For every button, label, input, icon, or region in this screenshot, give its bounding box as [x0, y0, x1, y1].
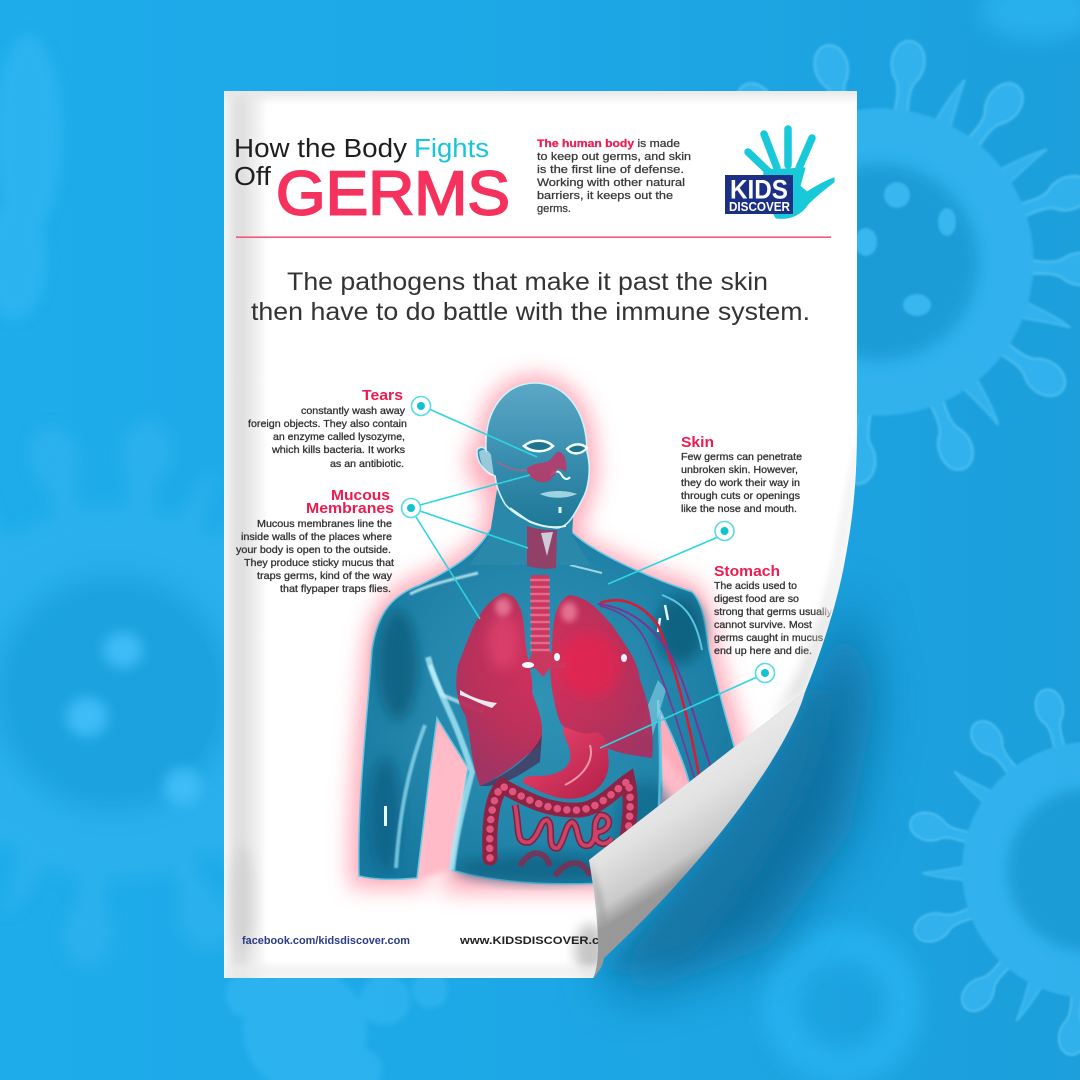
lungs — [456, 575, 653, 786]
chest rim highlights — [428, 657, 472, 870]
page curl cast shadow — [596, 590, 875, 990]
leader line: Tears — [429, 409, 537, 457]
right edge shading — [778, 440, 857, 711]
shoulder shading — [378, 610, 418, 720]
callout: Skin: they do work their way in — [681, 478, 800, 489]
callout: Skin — [608, 434, 802, 584]
poster sheet — [224, 91, 857, 979]
leader line: Skin — [608, 537, 718, 584]
leader lines: Mucous Membranes — [416, 475, 530, 619]
background blur: bottom left mottled virus — [226, 968, 448, 1080]
callout: Mucous Membranes: Mucous — [331, 487, 390, 504]
callout: Skin: through cuts or openings — [681, 491, 800, 502]
callout: Skin: Few germs can penetrate — [681, 452, 802, 463]
divider — [236, 236, 831, 238]
callout: Tears: which kills bacteria. It works — [271, 445, 405, 456]
icon: hand print — [748, 129, 834, 218]
callout: Stomach: cannot survive. Most — [714, 620, 812, 631]
callout: Skin: like the nose and mouth. — [681, 504, 797, 515]
title: Fights — [414, 135, 489, 163]
leader line: Stomach — [600, 677, 757, 748]
background light corner — [980, 0, 1080, 40]
nose — [551, 472, 570, 479]
callout: Tears: Tears — [362, 387, 403, 404]
subheading — [251, 268, 810, 326]
marker: Mucous Membranes — [402, 498, 420, 518]
callout: Mucous Membranes: traps germs, kind of the way — [257, 571, 393, 582]
logo: Kids Discover hand: DISCOVER — [729, 199, 791, 214]
intro text: The human body is made — [537, 138, 680, 150]
head — [477, 383, 589, 528]
callout: Tears — [248, 387, 537, 470]
flap tip shading — [590, 865, 606, 920]
background virus: bottom right — [907, 684, 1080, 1056]
callout: Tears: an enzyme called lysozyme, — [273, 432, 405, 443]
pink glow — [358, 383, 745, 884]
title: GERMS — [276, 160, 510, 228]
callout: Stomach: strong that germs usually — [714, 607, 833, 618]
footer: facebook.com/kidsdiscover.com — [242, 935, 410, 947]
intro text: germs. — [537, 203, 571, 215]
background blur: bottom centre — [780, 943, 904, 1067]
callout: Stomach — [600, 563, 833, 748]
callout: Tears: as an antibiotic. — [330, 459, 404, 470]
background virus: left core spots — [66, 632, 202, 806]
lower corner shading — [224, 845, 605, 979]
title: Off — [234, 163, 272, 191]
callout: Mucous Membranes: Mucous membranes line the — [257, 519, 392, 530]
neck — [470, 490, 590, 565]
title: How the Body — [234, 135, 407, 163]
pink gaps — [418, 722, 694, 878]
marker: Tears — [412, 396, 430, 416]
callout: Mucous Membranes: that flypaper traps flies. — [280, 584, 391, 595]
subheading: then have to do battle with the immune system. — [251, 298, 810, 326]
callout: Tears: constantly wash away — [301, 406, 406, 417]
callout: Mucous Membranes: Membranes — [306, 500, 394, 517]
callout: Mucous Membranes — [236, 475, 530, 619]
logo: Kids Discover hand — [725, 129, 834, 218]
callout: Stomach: end up here and die. — [714, 646, 812, 657]
intro text: Working with other natural — [537, 177, 685, 189]
stomach — [523, 727, 609, 799]
page curl dark backing — [600, 690, 825, 975]
figure silhouette — [359, 530, 738, 884]
callout: Tears: foreign objects. They also contain — [248, 419, 407, 430]
logo box — [725, 175, 793, 214]
page curl flap — [589, 692, 805, 978]
background virus: top right core spots — [855, 182, 956, 316]
arm vessels — [598, 600, 715, 790]
intro text — [537, 138, 691, 215]
logo: Kids Discover hand: KIDS — [730, 174, 788, 204]
footer: www.KIDSDISCOVER.com — [459, 935, 618, 947]
callout: Mucous Membranes: They produce sticky mucus that — [244, 558, 394, 569]
footer — [242, 936, 598, 944]
background virus: top right — [660, 39, 1080, 486]
callout: Skin: unbroken skin. However, — [681, 465, 798, 476]
trachea — [520, 575, 566, 677]
marker: Skin — [715, 522, 734, 540]
subheading: The pathogens that make it past the skin — [287, 268, 768, 296]
red sinus — [527, 452, 567, 482]
background blur: top left streaks — [0, 35, 62, 320]
head and neck — [470, 383, 590, 569]
intro text: is the first line of defense. — [537, 164, 684, 176]
eyes — [524, 441, 553, 451]
background virus: left blurred — [0, 423, 383, 963]
anatomy figure — [358, 383, 745, 884]
ear highlight — [479, 450, 494, 476]
callout: Skin: Skin — [681, 434, 714, 451]
intro text: to keep out germs, and skin — [537, 151, 691, 163]
intro text: barriers, it keeps out the — [537, 190, 673, 202]
callout: Stomach: Stomach — [714, 563, 780, 580]
callout: Mucous Membranes: your body is open to the outside. — [236, 545, 391, 556]
mouth — [540, 491, 577, 498]
title — [234, 135, 510, 228]
callout: Stomach: The acids used to — [714, 581, 797, 592]
callout: Stomach: germs caught in mucus — [714, 633, 823, 644]
callout: Stomach: digest food are so — [714, 594, 799, 605]
throat — [527, 526, 557, 569]
marker: Stomach — [756, 664, 774, 682]
callout: Mucous Membranes: inside walls of the places where — [241, 532, 392, 543]
intestines — [490, 781, 630, 876]
